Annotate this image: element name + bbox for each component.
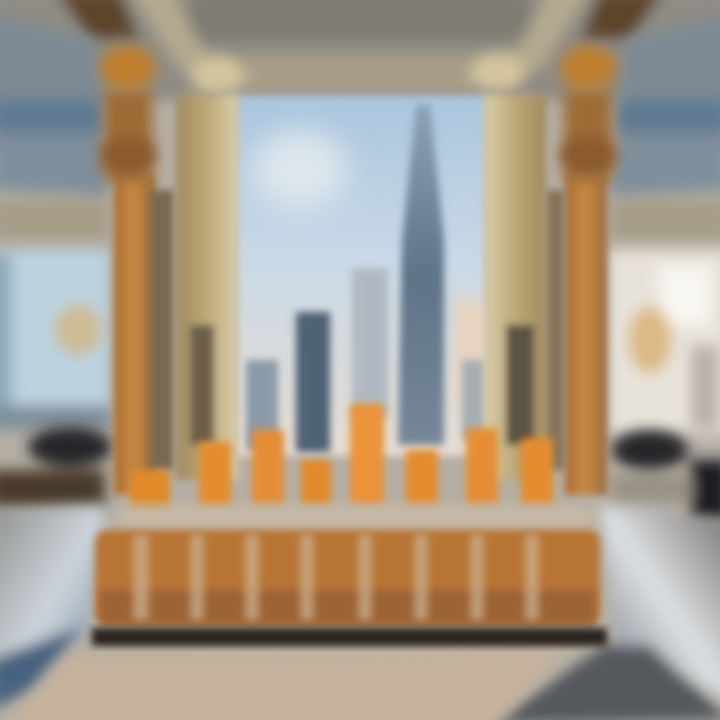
- bottom floor: [0, 650, 570, 720]
- right furniture: [612, 430, 720, 520]
- left furniture: [0, 427, 112, 508]
- right floor: [490, 505, 720, 720]
- mid tower light: [352, 268, 388, 418]
- right beige column: [484, 95, 546, 480]
- left ceiling panel: [0, 15, 110, 240]
- small left tower: [246, 360, 278, 450]
- right ceiling panel: [610, 15, 720, 240]
- base vertical pale stripes: [133, 535, 539, 620]
- base shadow: [92, 628, 607, 646]
- orange bars: [130, 404, 553, 510]
- small right tower: [462, 360, 486, 440]
- top capitals glow: [190, 52, 526, 95]
- orange base counter: [95, 530, 600, 625]
- left orange column: [100, 46, 174, 495]
- right orange column: [545, 46, 616, 495]
- left floor: [0, 505, 105, 710]
- centre window sky: [236, 96, 486, 456]
- skyline buildings: [246, 105, 486, 452]
- right side window: [608, 250, 720, 435]
- ceiling: [0, 0, 720, 100]
- left side window: [0, 250, 110, 430]
- counter top highlight: [120, 506, 590, 528]
- left beige column: [176, 95, 238, 480]
- tall tower: [398, 105, 444, 445]
- dark tower: [296, 312, 330, 452]
